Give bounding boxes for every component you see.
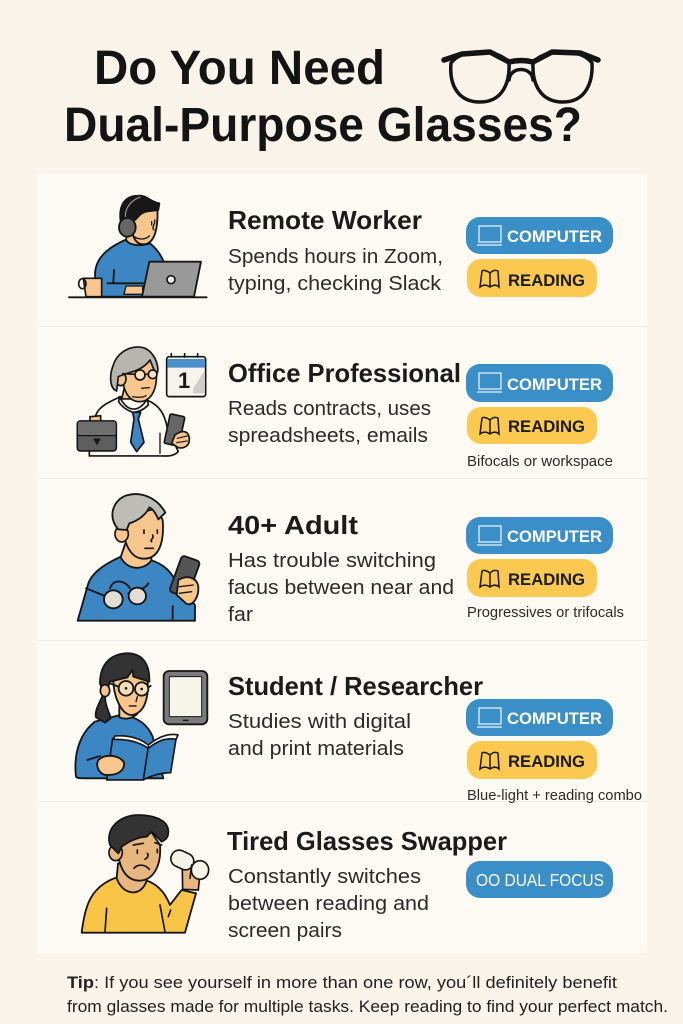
heading: Office Professional xyxy=(228,358,461,388)
heading: Remote Worker xyxy=(228,205,422,235)
description: Constantly switches xyxy=(228,865,421,888)
description xyxy=(228,865,429,942)
heading: Tired Glasses Swapper xyxy=(227,826,507,856)
badges xyxy=(466,364,613,444)
description: facus between near and xyxy=(228,576,454,599)
description: far xyxy=(228,603,253,626)
badges: READING xyxy=(508,753,585,771)
description: Reads contracts, uses xyxy=(228,397,431,420)
title xyxy=(64,42,582,152)
description: Spends hours in Zoom, xyxy=(228,245,443,268)
illustration: student with book and tablet xyxy=(75,653,207,780)
description: between reading and xyxy=(228,892,429,915)
note: Blue-light + reading combo xyxy=(467,788,642,804)
panel: rows background xyxy=(37,174,647,953)
title: Dual-Purpose Glasses? xyxy=(64,99,582,152)
description: and print materials xyxy=(228,737,404,760)
illustration: office professional with briefcase, phone and calendar xyxy=(77,347,206,456)
row: Student / Researcher xyxy=(75,653,642,804)
badges: COMPUTER xyxy=(507,709,602,728)
badges xyxy=(466,699,613,779)
description xyxy=(228,245,443,295)
description xyxy=(228,710,411,760)
badges: COMPUTER xyxy=(507,527,602,546)
badge: dual focus xyxy=(466,861,613,898)
description: Studies with digital xyxy=(228,710,411,733)
tip xyxy=(67,974,668,1016)
description xyxy=(228,549,454,626)
note: Bifocals or workspace xyxy=(467,454,613,470)
badges xyxy=(466,217,613,297)
badges: COMPUTER xyxy=(507,375,602,394)
row: Remote Worker xyxy=(69,196,613,297)
badges: READING xyxy=(508,418,585,436)
description: Has trouble switching xyxy=(228,549,436,572)
row: Tired Glasses Swapper xyxy=(82,815,613,942)
row: 40+ Adult xyxy=(78,494,624,626)
tip: from glasses made for multiple tasks. Keep reading to find your perfect match. xyxy=(67,998,668,1016)
heading: 40+ Adult xyxy=(228,510,358,540)
badges: COMPUTER xyxy=(507,227,602,246)
badges: READING xyxy=(508,272,585,290)
calendar number: 1 xyxy=(178,368,190,393)
icon: glasses xyxy=(444,52,598,102)
badge: dual focus: OO DUAL FOCUS xyxy=(476,870,604,890)
description: screen pairs xyxy=(228,919,342,942)
badges xyxy=(466,517,613,597)
heading: Student / Researcher xyxy=(228,671,483,701)
illustration: remote worker at laptop xyxy=(69,196,207,297)
description: typing, checking Slack xyxy=(228,272,442,295)
tip: Tip: If you see yourself in more than one row, you´ll definitely benefit xyxy=(67,974,617,992)
title: Do You Need xyxy=(94,42,385,95)
note: Progressives or trifocals xyxy=(467,605,624,621)
badges: READING xyxy=(508,571,585,589)
description xyxy=(228,397,431,447)
description: spreadsheets, emails xyxy=(228,424,428,447)
illustration: older adult squinting at phone xyxy=(78,494,200,621)
illustration: tired person holding glasses xyxy=(82,815,209,933)
row: Office Professional xyxy=(77,347,613,470)
